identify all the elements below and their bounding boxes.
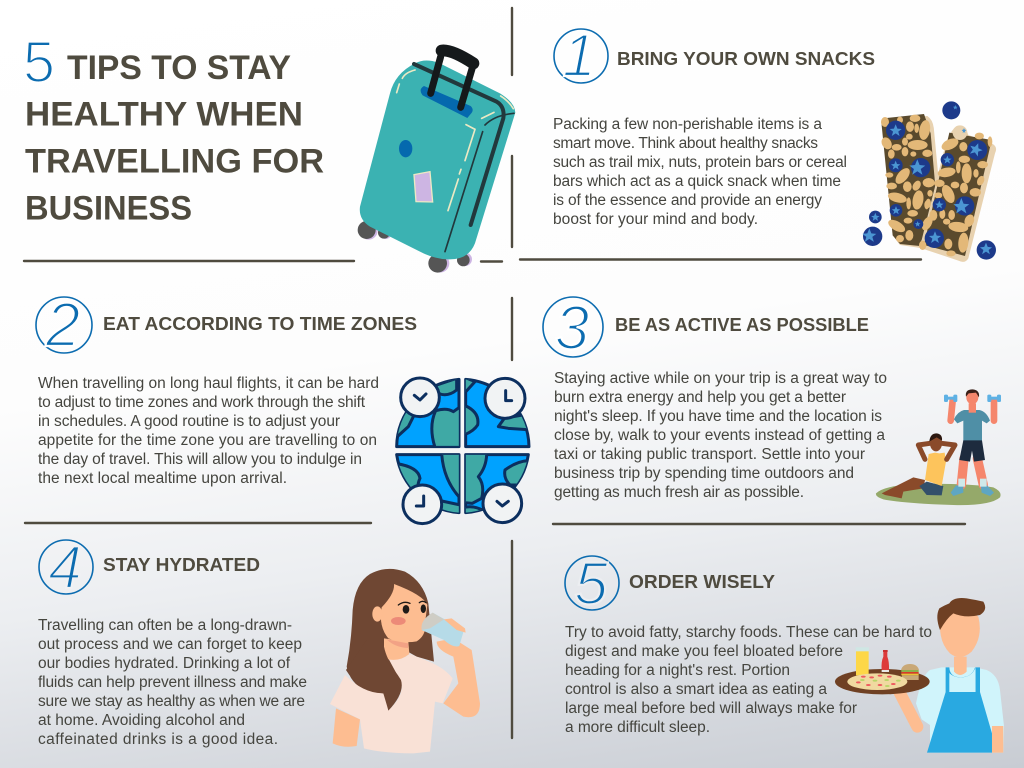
panel: tip 3 be as active as possible xyxy=(543,294,1001,505)
number badge 5: 5 xyxy=(574,550,608,617)
title xyxy=(23,30,324,228)
body text 2: in schedules. A good routine is to adjust your xyxy=(38,413,340,430)
body text 3: business trip by spending time outdoors and xyxy=(554,465,854,482)
illustration: waiter with food tray xyxy=(835,598,1004,753)
body text 1: smart move. Think about healthy snacks xyxy=(553,135,818,152)
body text 5: Try to avoid fatty, starchy foods. These can be hard to xyxy=(565,624,932,641)
panel: tip 4 stay hydrated xyxy=(38,534,480,753)
body text 5: a more difficult sleep. xyxy=(565,719,710,736)
panel: tip 1 bring your own snacks xyxy=(553,22,996,262)
body text 5 xyxy=(565,624,932,736)
heading 1: BRING YOUR OWN SNACKS xyxy=(617,48,875,69)
body text 5: control is also a smart idea as eating a xyxy=(565,681,827,698)
body text 3 xyxy=(554,370,887,501)
body text 4: our bodies hydrated. Drinking a lot of xyxy=(38,655,291,672)
icon: globe with clocks xyxy=(392,377,532,524)
heading 3: BE AS ACTIVE AS POSSIBLE xyxy=(615,314,869,335)
body text 3: taxi or taking public transport. Settle into your xyxy=(554,446,865,463)
heading 4: STAY HYDRATED xyxy=(103,554,260,575)
body text 4 xyxy=(38,617,307,748)
body text 2 xyxy=(38,375,379,487)
body text 1: is of the essence and provide an energy xyxy=(553,192,822,209)
title text: HEALTHY WHEN xyxy=(25,96,303,134)
title numeral 5: 5 xyxy=(23,30,55,95)
title text: BUSINESS xyxy=(25,190,192,228)
body text 3: Staying active while on your trip is a great way to xyxy=(554,370,887,387)
number badge 4 xyxy=(39,534,93,601)
body text 1: such as trail mix, nuts, protein bars or cereal xyxy=(553,154,847,171)
body text 2: When travelling on long haul flights, it can be hard xyxy=(38,375,379,392)
body text 5: heading for a night's rest. Portion xyxy=(565,662,790,679)
body text 4: Travelling can often be a long-drawn- xyxy=(38,617,292,634)
panel: tip 5 order wisely xyxy=(565,550,1004,753)
number badge 3 xyxy=(543,294,603,363)
body text 3: night's sleep. If you have time and the location is xyxy=(554,408,882,425)
body text 2: appetite for the time zone you are travelling to on xyxy=(38,432,377,449)
number badge 1 xyxy=(554,22,608,89)
panel: tip 2 eat according to time zones xyxy=(36,291,532,524)
heading 5: ORDER WISELY xyxy=(629,571,776,592)
body text 2: the day of travel. This will allow you to indulge in xyxy=(38,451,362,468)
number badge 1: 1 xyxy=(562,22,596,89)
number badge 4: 4 xyxy=(48,534,82,601)
icon: two people exercising xyxy=(876,389,1001,505)
body text 4: out process and we can forget to keep xyxy=(38,636,302,653)
title text: TIPS TO STAY xyxy=(67,49,291,87)
body text 5: large meal before bed will always make for xyxy=(565,700,857,717)
body text 3: getting as much fresh air as possible. xyxy=(554,484,804,501)
icon: suitcase xyxy=(358,51,515,273)
body text 3: close by, walk to your events instead of getting a xyxy=(554,427,885,444)
number badge 5 xyxy=(565,550,619,617)
body text 2: the next local mealtime upon arrival. xyxy=(38,470,287,487)
number badge 2: 2 xyxy=(45,291,80,360)
title text xyxy=(25,49,324,228)
heading 2: EAT ACCORDING TO TIME ZONES xyxy=(103,313,417,334)
illustration: woman drinking water xyxy=(330,569,480,753)
body text 1: Packing a few non-perishable items is a xyxy=(553,116,822,133)
icon: granola bars with blueberries xyxy=(862,101,996,262)
body text 3: burn extra energy and help you get a better xyxy=(554,389,846,406)
body text 1 xyxy=(553,116,847,228)
body text 5: digest and make you feel bloated before xyxy=(565,643,843,660)
body text 1: bars which act as a quick snack when time xyxy=(553,173,841,190)
body text 4: fluids can help prevent illness and make xyxy=(38,674,307,691)
number badge 3: 3 xyxy=(555,294,589,363)
body text 4: sure we stay as healthy as when we are xyxy=(38,693,305,710)
body text 4: at home. Avoiding alcohol and xyxy=(38,712,245,729)
number badge 2 xyxy=(36,291,92,360)
body text 4: caffeinated drinks is a good idea. xyxy=(38,731,278,748)
title text: TRAVELLING FOR xyxy=(25,142,324,180)
body text 1: boost for your mind and body. xyxy=(553,211,758,228)
body text 2: to adjust to time zones and work through the shift xyxy=(38,394,366,411)
